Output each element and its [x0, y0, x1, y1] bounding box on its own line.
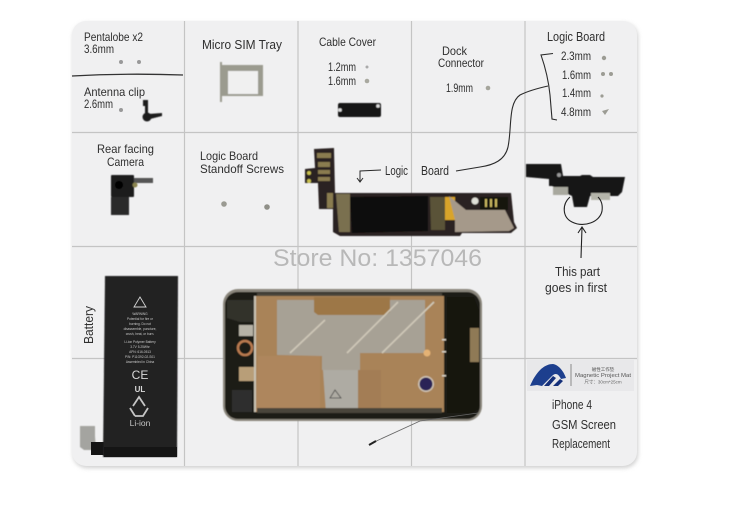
battery photo: Assembled in China: [126, 360, 154, 364]
battery photo: Li-ion Polymer Battery: [124, 340, 156, 344]
battery label: Battery: [82, 305, 96, 344]
cell: dock connector: [438, 44, 490, 95]
cell: antenna clip: [84, 85, 162, 122]
logic board photo: [305, 148, 517, 236]
logo sticker: Magnetic Project Mat: [575, 373, 631, 379]
cell: pentalobe screws: Pentalobe x2: [84, 30, 143, 44]
right black battery connector area: [447, 297, 479, 413]
cell: logic board screws: 1.4mm: [562, 86, 591, 100]
connector line: bracket to logic board: [456, 54, 557, 171]
battery photo: WARNING: [132, 312, 148, 316]
antenna bracket part: [526, 164, 625, 207]
title: iPhone 4 GSM Screen Replacement: iPhone 4: [552, 397, 592, 412]
circle and arrow callout: [564, 197, 602, 258]
cell: cable cover: 1.6mm: [328, 76, 356, 88]
battery photo: [80, 276, 178, 457]
iPhone chassis photo: [223, 289, 482, 421]
battery photo: Li-ion: [130, 418, 151, 428]
cell: logic board screws: [547, 30, 613, 119]
title: iPhone 4 GSM Screen Replacement: GSM Screen: [552, 417, 616, 432]
cell: logic board standoff screws: Standoff Screws: [200, 162, 284, 176]
cell: logic board standoff screws: Logic Board: [200, 149, 258, 163]
cell: rear facing camera: [97, 142, 154, 215]
cell: pentalobe screws: 3.6mm: [84, 44, 114, 56]
cell: antenna clip: Antenna clip: [84, 85, 145, 99]
cell: logic board standoff screws: [200, 149, 284, 210]
label: logic board with arrow: Board: [421, 164, 449, 178]
battery photo: APN: 616-0513: [129, 350, 151, 354]
battery photo: CE: [132, 368, 148, 382]
cell: rear facing camera: Rear facing: [97, 142, 154, 156]
cell: dock connector: Dock: [442, 44, 468, 58]
callout text: this part goes in first: [545, 265, 608, 295]
battery photo: UL: [135, 385, 145, 394]
label: logic board with arrow: Logic: [385, 164, 408, 178]
cell: dock connector: Connector: [438, 56, 484, 70]
left component area: [227, 300, 255, 322]
cell: cable cover: 1.2mm: [328, 62, 356, 74]
cell: logic board screws: 4.8mm: [561, 105, 591, 119]
cell: micro SIM tray: Micro SIM Tray: [202, 38, 283, 52]
cell: logic board screws: 2.3mm: [561, 49, 591, 63]
logo sticker: [527, 360, 634, 391]
copper midframe: [256, 296, 444, 412]
cell: pentalobe screws: [72, 30, 183, 76]
callout text: this part goes in first: This part: [555, 265, 600, 279]
cell: rear facing camera: Camera: [107, 155, 144, 169]
battery photo: disassemble, puncture,: [124, 327, 157, 331]
cell: antenna clip: 2.6mm: [84, 99, 113, 111]
battery photo: Potential for fire or: [127, 317, 154, 321]
watermark: store number: Store No: 1357046: [273, 245, 482, 272]
title: iPhone 4 GSM Screen Replacement: [552, 397, 616, 451]
cell: cable cover: Cable Cover: [319, 35, 376, 49]
label: logic board with arrow: [357, 164, 449, 182]
cell: logic board screws: Logic Board: [547, 30, 605, 44]
icon: blue mountain logo: [530, 364, 566, 386]
battery photo: 3.7V 5.25Whr: [130, 345, 151, 349]
panel: mat background: [72, 21, 638, 468]
title: iPhone 4 GSM Screen Replacement: Replacement: [552, 436, 610, 451]
battery photo: crush, heat, or burn.: [126, 332, 154, 336]
logo sticker: 磁性工作垫: [592, 366, 615, 373]
cell: logic board screws: 1.6mm: [562, 68, 591, 82]
callout text: this part goes in first: goes in first: [545, 281, 608, 295]
cell: micro SIM tray: [202, 38, 283, 102]
logo sticker: 尺寸：30cm*25cm: [584, 378, 622, 386]
battery photo: burning. Do not: [129, 322, 151, 326]
cell: dock connector: 1.9mm: [446, 83, 473, 95]
cell: cable cover: [319, 35, 381, 117]
battery photo: P/N: P11G92-02-S01: [125, 355, 155, 359]
antenna wire: [369, 413, 478, 445]
